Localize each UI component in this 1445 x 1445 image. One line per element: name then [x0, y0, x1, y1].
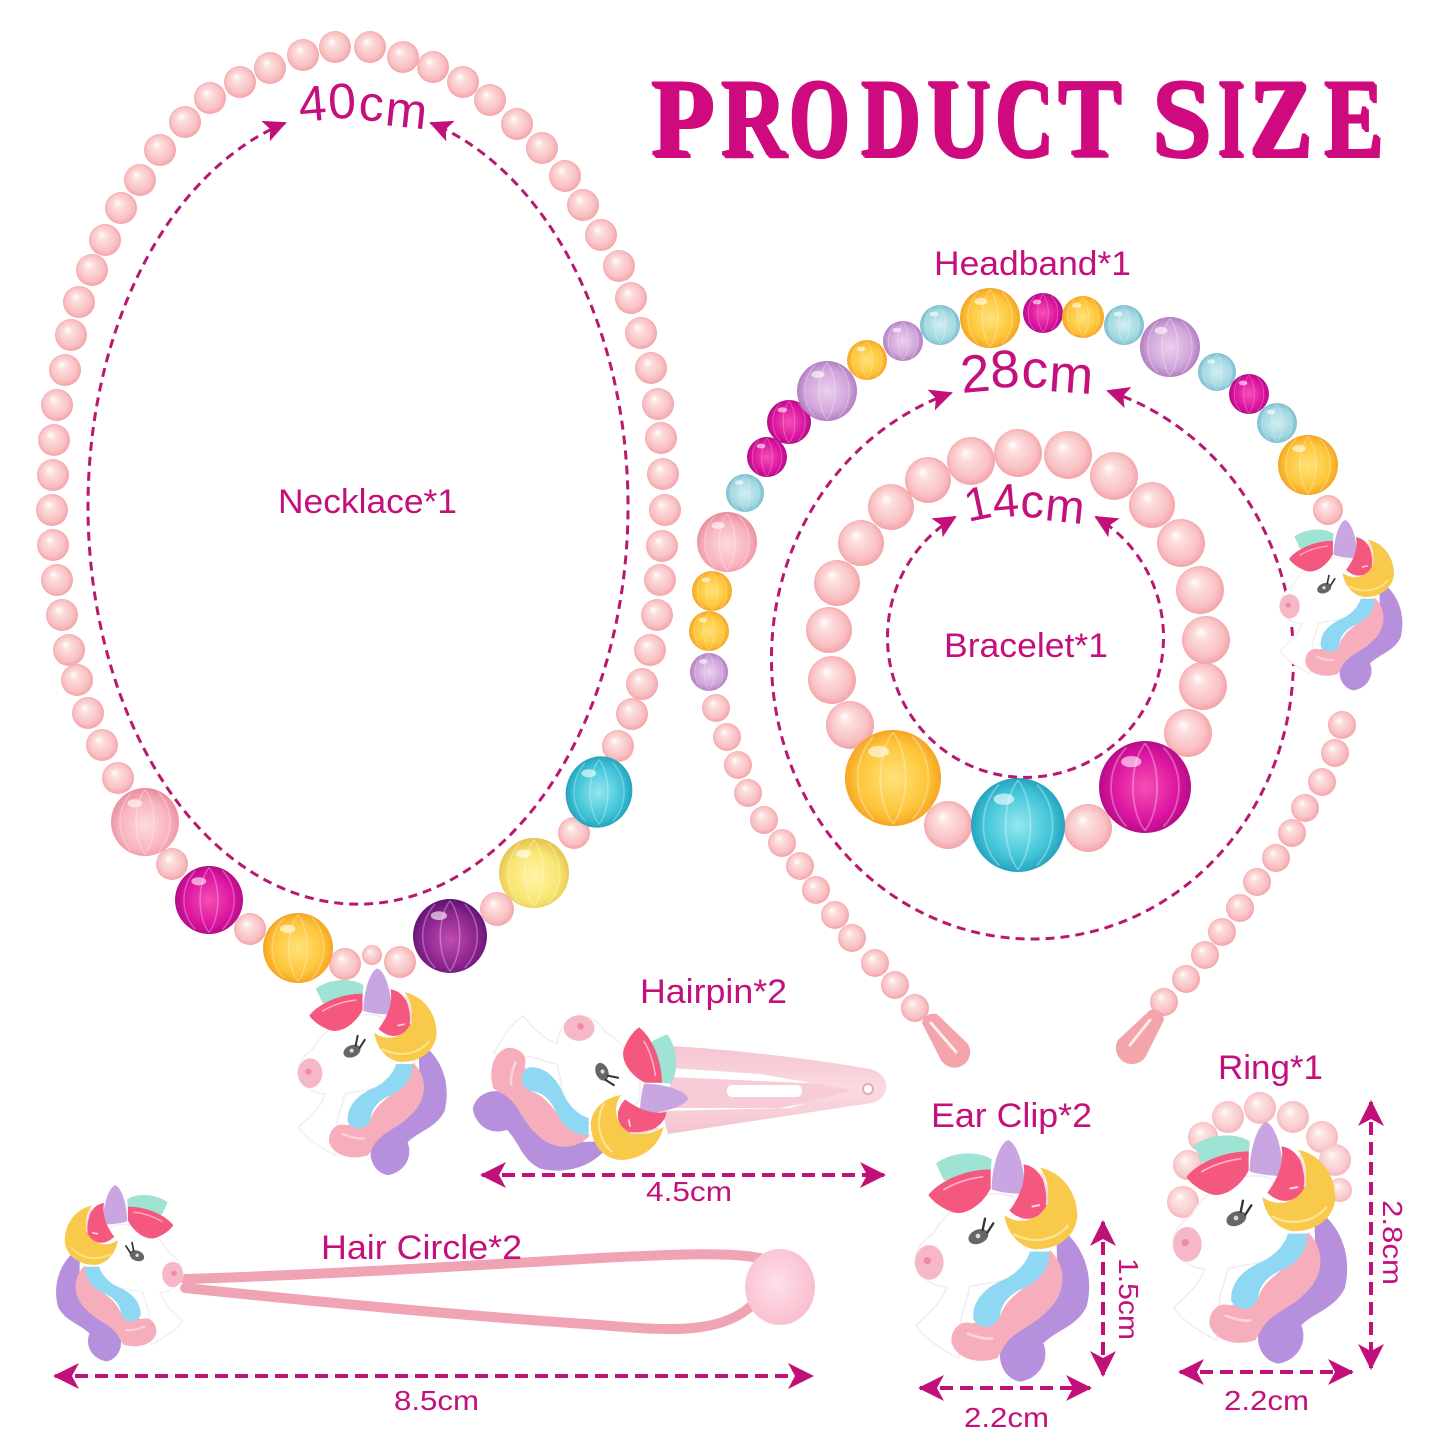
- ring height value: 2.8cm: [1377, 1200, 1408, 1285]
- title: O: [788, 56, 848, 180]
- necklace: [36, 31, 681, 1175]
- hairpin label: Hairpin*2: [640, 973, 787, 1011]
- ring label: Ring*1: [1218, 1049, 1323, 1087]
- headband pearls: [702, 495, 1356, 1022]
- hairpin: [473, 1015, 886, 1171]
- headband label: Headband*1: [934, 245, 1131, 283]
- ear clip label: Ear Clip*2: [931, 1097, 1092, 1135]
- title: I: [1217, 56, 1243, 180]
- ear clip height arrow: [1101, 1222, 1105, 1375]
- bracelet: [806, 429, 1230, 872]
- icon: hairpin unicorn: [473, 1015, 688, 1171]
- title: P: [650, 56, 713, 180]
- bracelet label: Bracelet*1: [944, 627, 1108, 665]
- bracelet measure loop: [888, 517, 1164, 777]
- hairpin width value: 4.5cm: [646, 1176, 732, 1207]
- title: Z: [1248, 56, 1311, 180]
- headband beads: [689, 288, 1338, 691]
- hairpin metal clip: [662, 1046, 886, 1134]
- ring pearls: [1167, 1092, 1352, 1218]
- hair circle width value: 8.5cm: [394, 1385, 479, 1416]
- headband teardrop tips: [922, 1010, 1164, 1068]
- necklace length label: 40cm: [296, 73, 430, 140]
- title: R: [720, 56, 786, 180]
- title: U: [926, 56, 989, 180]
- ring width arrow: [1180, 1370, 1352, 1374]
- hair circle: [56, 1185, 815, 1361]
- headband length label: 28cm: [958, 340, 1095, 406]
- headband measure loop: [771, 391, 1293, 939]
- hair circle label: Hair Circle*2: [321, 1229, 522, 1267]
- hairpin width arrow: [482, 1173, 884, 1177]
- title: [650, 56, 1385, 183]
- headband: [689, 288, 1356, 1068]
- icon: hair circle unicorn: [56, 1185, 183, 1361]
- ear clip height value: 1.5cm: [1113, 1258, 1144, 1340]
- ring: [1167, 1092, 1352, 1364]
- icon: necklace unicorn pendant: [298, 969, 447, 1175]
- bracelet large beads: [845, 730, 1191, 872]
- necklace large beads: [111, 747, 642, 983]
- title: D: [860, 56, 919, 180]
- necklace pearls: [36, 31, 681, 980]
- ring height arrow: [1369, 1102, 1373, 1368]
- hair circle width arrow: [55, 1374, 812, 1378]
- title: S: [1151, 56, 1210, 180]
- title: T: [1057, 56, 1120, 180]
- title: E: [1323, 56, 1382, 180]
- title: C: [994, 56, 1052, 180]
- icon: ring unicorn: [1173, 1122, 1347, 1364]
- bracelet pearls: [806, 429, 1230, 852]
- ear clip width arrow: [920, 1386, 1090, 1390]
- necklace measure loop: [88, 123, 628, 904]
- ear clip width value: 2.2cm: [964, 1402, 1049, 1433]
- icon: ear clip unicorn: [915, 1140, 1089, 1382]
- icon: headband unicorn: [1280, 520, 1402, 690]
- hair circle elastic band: [185, 1254, 765, 1329]
- ring width value: 2.2cm: [1224, 1385, 1309, 1416]
- hair circle ball: [745, 1249, 815, 1325]
- bracelet length label: 14cm: [959, 473, 1087, 534]
- necklace label: Necklace*1: [278, 483, 457, 521]
